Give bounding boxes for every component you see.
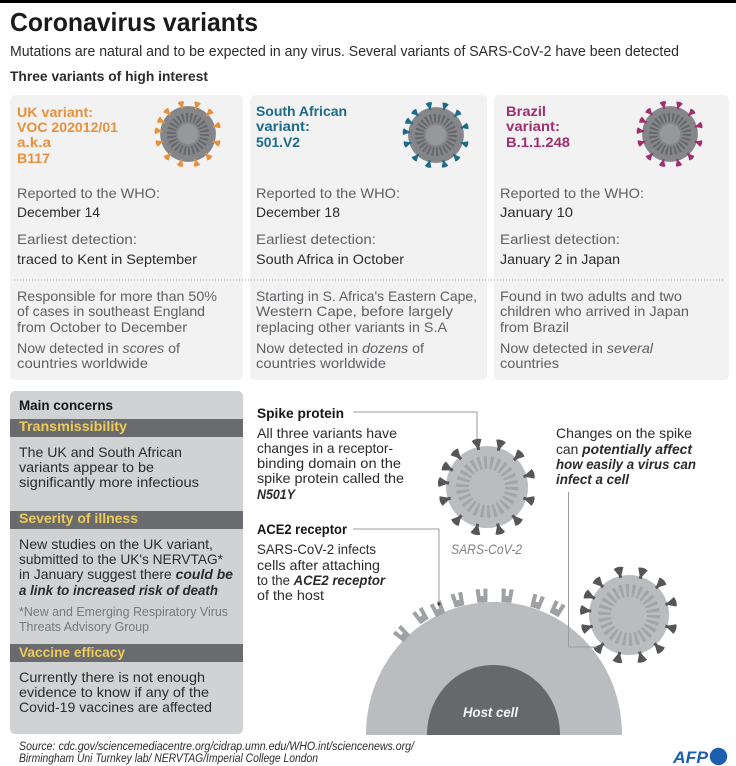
reported date: December 14: [17, 204, 100, 220]
earliest detection: Earliest detection:: [17, 231, 137, 247]
text block: changes on the spike: how easily a virus can: [556, 456, 696, 472]
host cell nucleus: Host cell: [463, 704, 519, 720]
earliest detection: [500, 231, 620, 267]
virus: attaching to host cell: [579, 566, 678, 664]
reported date: [256, 185, 400, 220]
title: Coronavirus variants: [10, 7, 258, 37]
text block: spike protein: binding domain on the: [257, 455, 401, 471]
heading: UK variant: B117: [17, 150, 50, 166]
virus: SARS-CoV-2: [437, 438, 536, 557]
description: replacing other variants in S.A: [256, 319, 448, 335]
description: of cases in southeast England: [17, 303, 205, 319]
reported date: January 10: [500, 204, 573, 220]
heading: main concerns: Main concerns: [19, 397, 113, 413]
heading: Brazil variant: variant:: [506, 118, 560, 134]
heading: UK variant: VOC 202012/01: [17, 119, 118, 135]
reported date: Reported to the WHO:: [500, 185, 644, 201]
virus: SARS-CoV-2: SARS-CoV-2: [451, 541, 522, 557]
description: Now detected in scores of: [17, 340, 180, 356]
description: Starting in S. Africa's Eastern Cape,: [256, 288, 477, 304]
reported date: Reported to the WHO:: [256, 185, 400, 201]
leader line: spike protein: [353, 412, 477, 441]
description: [17, 288, 217, 371]
section: vaccine efficacy: Covid-19 vaccines are affected: [19, 699, 212, 715]
heading: South African variant: [256, 103, 347, 150]
text block: changes on the spike: can potentially affect: [556, 441, 693, 457]
heading: Brazil variant: B.1.1.248: [506, 134, 570, 150]
section: severity of illness: *New and Emerging Respiratory Virus: [19, 604, 228, 619]
section: severity of illness: submitted to the UK's NERVTAG*: [19, 551, 224, 567]
ACE2 receptors: [393, 588, 566, 643]
logo: AFP: [672, 748, 727, 766]
description: countries worldwide: [17, 355, 148, 371]
description: Now detected in several: [500, 340, 654, 356]
description: countries worldwide: [256, 355, 386, 371]
section: vaccine efficacy: Vaccine efficacy: [19, 644, 125, 660]
description: from Brazil: [500, 319, 569, 335]
earliest detection: Earliest detection:: [500, 231, 620, 247]
description: Western Cape, before largely: [256, 303, 453, 319]
text block: ACE2 receptor: ACE2 receptor: [257, 521, 348, 537]
text block: ACE2 receptor: cells after attaching: [257, 557, 380, 573]
text block: changes on the spike: infect a cell: [556, 471, 630, 487]
leader line: changes on the spike: [568, 492, 597, 647]
reported date: Reported to the WHO:: [17, 185, 160, 201]
section: transmissibility: [10, 418, 243, 490]
source note: [19, 741, 416, 765]
receptor contact dot: [438, 602, 440, 606]
heading: South African variant: 501.V2: [256, 134, 300, 150]
earliest detection: [256, 231, 404, 267]
earliest detection: South Africa in October: [256, 251, 404, 267]
earliest detection: Earliest detection:: [256, 231, 376, 247]
description: Responsible for more than 50%: [17, 288, 217, 304]
heading: Brazil variant: [506, 103, 570, 150]
section: vaccine efficacy: Currently there is not enough: [19, 669, 205, 685]
panel: main concerns: [10, 391, 243, 734]
section: vaccine efficacy: evidence to know if any of the: [19, 684, 209, 700]
panel: Brazil variant: [494, 95, 729, 380]
panel: UK variant: [10, 95, 243, 380]
text block: ACE2 receptor: [257, 521, 386, 603]
description: countries: [500, 355, 559, 371]
section: severity of illness: [10, 510, 243, 634]
heading: UK variant: UK variant:: [17, 104, 93, 120]
section heading: Three variants of high interest: [10, 68, 208, 84]
section: severity of illness: Severity of illness: [19, 510, 138, 526]
leader line: ACE2 receptor: [353, 529, 439, 603]
section: severity of illness: Threats Advisory Group: [19, 619, 149, 634]
reported date: [500, 185, 644, 220]
reported date: December 18: [256, 204, 340, 220]
heading: Brazil variant: Brazil: [506, 103, 546, 119]
description: Found in two adults and two: [500, 288, 682, 304]
source note: Birmingham Uni Turnkey lab/ NERVTAG/Imperial College London: [19, 753, 318, 765]
panel: South African variant: [250, 95, 487, 380]
section: transmissibility: significantly more infectious: [19, 474, 199, 490]
section: vaccine efficacy: [10, 644, 243, 715]
text block: spike protein: changes in a receptor-: [257, 440, 393, 456]
section: transmissibility: The UK and South African: [19, 444, 182, 460]
text block: spike protein: [257, 405, 404, 502]
description: from October to December: [17, 319, 187, 335]
text block: spike protein: Spike protein: [257, 405, 344, 421]
text block: ACE2 receptor: SARS-CoV-2 infects: [257, 541, 376, 557]
description: [256, 288, 477, 371]
heading: UK variant: a.k.a: [17, 134, 51, 150]
earliest detection: [17, 231, 197, 267]
text block: spike protein: All three variants have: [257, 425, 397, 441]
description: [500, 288, 689, 371]
section: transmissibility: Transmissibility: [19, 418, 127, 434]
section: transmissibility: variants appear to be: [19, 459, 154, 475]
icon: teal virus: [402, 102, 469, 168]
heading: South African variant: variant:: [256, 118, 310, 134]
text block: changes on the spike: [556, 425, 696, 487]
source note: Source: cdc.gov/sciencemediacentre.org/cidrap.umn.edu/WHO.int/sciencenews.org/: [19, 741, 416, 753]
section: severity of illness: in January suggest there could be: [19, 566, 233, 582]
text block: ACE2 receptor: of the host: [257, 587, 324, 603]
text block: spike protein: spike protein called the: [257, 470, 404, 486]
text block: spike protein: N501Y: [257, 486, 296, 502]
icon: magenta virus: [636, 101, 703, 167]
earliest detection: January 2 in Japan: [500, 251, 620, 267]
text block: ACE2 receptor: to the ACE2 receptor: [257, 572, 386, 588]
section: severity of illness: a link to increased risk of death: [19, 582, 218, 598]
subtitle: Mutations are natural and to be expected in any virus. Several variants of SARS-CoV-2 have been detected: [10, 43, 679, 60]
earliest detection: traced to Kent in September: [17, 251, 197, 267]
reported date: [17, 185, 160, 220]
icon: orange virus: [154, 101, 221, 167]
heading: UK variant: [17, 104, 118, 166]
description: Now detected in dozens of: [256, 340, 424, 356]
section: severity of illness: New studies on the UK variant,: [19, 536, 213, 552]
text block: changes on the spike: Changes on the spike: [556, 425, 692, 441]
host cell outer membrane: [366, 602, 622, 735]
host cell nucleus: [427, 665, 560, 735]
heading: South African variant: South African: [256, 103, 347, 119]
top black rule: [0, 0, 736, 3]
description: children who arrived in Japan: [500, 303, 689, 319]
